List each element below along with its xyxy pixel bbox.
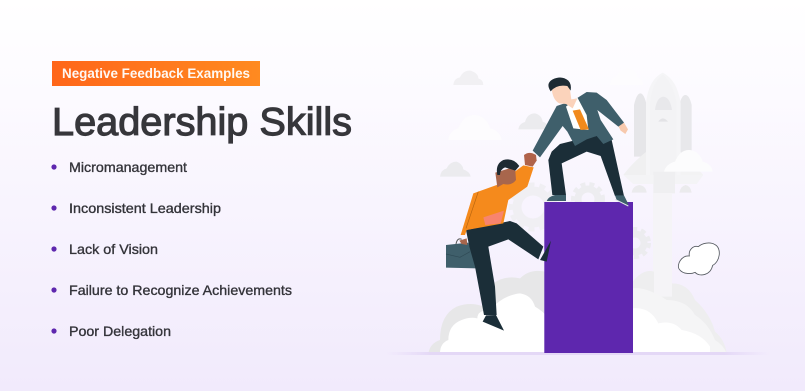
shirt	[566, 97, 588, 130]
neck and face	[552, 84, 577, 108]
tie	[573, 109, 589, 130]
hair	[497, 159, 519, 175]
rocket exhaust column	[653, 193, 672, 300]
top man reaching down	[533, 77, 628, 206]
bullet: Lack of Vision: Lack of Vision	[69, 241, 158, 257]
briefcase	[446, 238, 477, 268]
bullet list	[51, 159, 292, 339]
bullet: Inconsistent Leadership: Inconsistent Leadership	[69, 200, 221, 216]
icon: gears	[511, 184, 649, 257]
ground line	[385, 352, 770, 355]
left grey cloud	[428, 271, 545, 353]
shoes	[547, 195, 628, 206]
jacket and arms	[533, 92, 624, 157]
right grey cloud	[633, 271, 727, 353]
icon: rocket	[623, 73, 713, 193]
hair	[548, 77, 571, 91]
torso and arm	[461, 153, 537, 235]
illustration background: faint clouds	[440, 68, 643, 177]
left white cloud	[440, 293, 545, 353]
rear hand	[618, 123, 628, 134]
lower man climbing	[446, 153, 551, 331]
clouds behind the column	[428, 271, 727, 353]
icon: outlined small cloud	[678, 243, 719, 275]
bullet: Poor Delegation: Poor Delegation	[69, 323, 171, 339]
title: Leadership Skills	[52, 101, 352, 144]
bullet: Failure to Recognize Achievements: Failure to Recognize Achievements	[69, 282, 292, 298]
bullet: Micromanagement: Micromanagement	[69, 159, 187, 175]
trousers	[548, 135, 624, 196]
badge: Negative Feedback Examples	[52, 61, 260, 86]
right white cloud	[633, 308, 710, 353]
trousers and shoes	[466, 221, 551, 331]
head	[495, 167, 516, 187]
purple column	[544, 202, 633, 353]
hands clasped	[524, 153, 537, 167]
badge: Negative Feedback Examples: Negative Feedback Examples	[62, 66, 250, 81]
